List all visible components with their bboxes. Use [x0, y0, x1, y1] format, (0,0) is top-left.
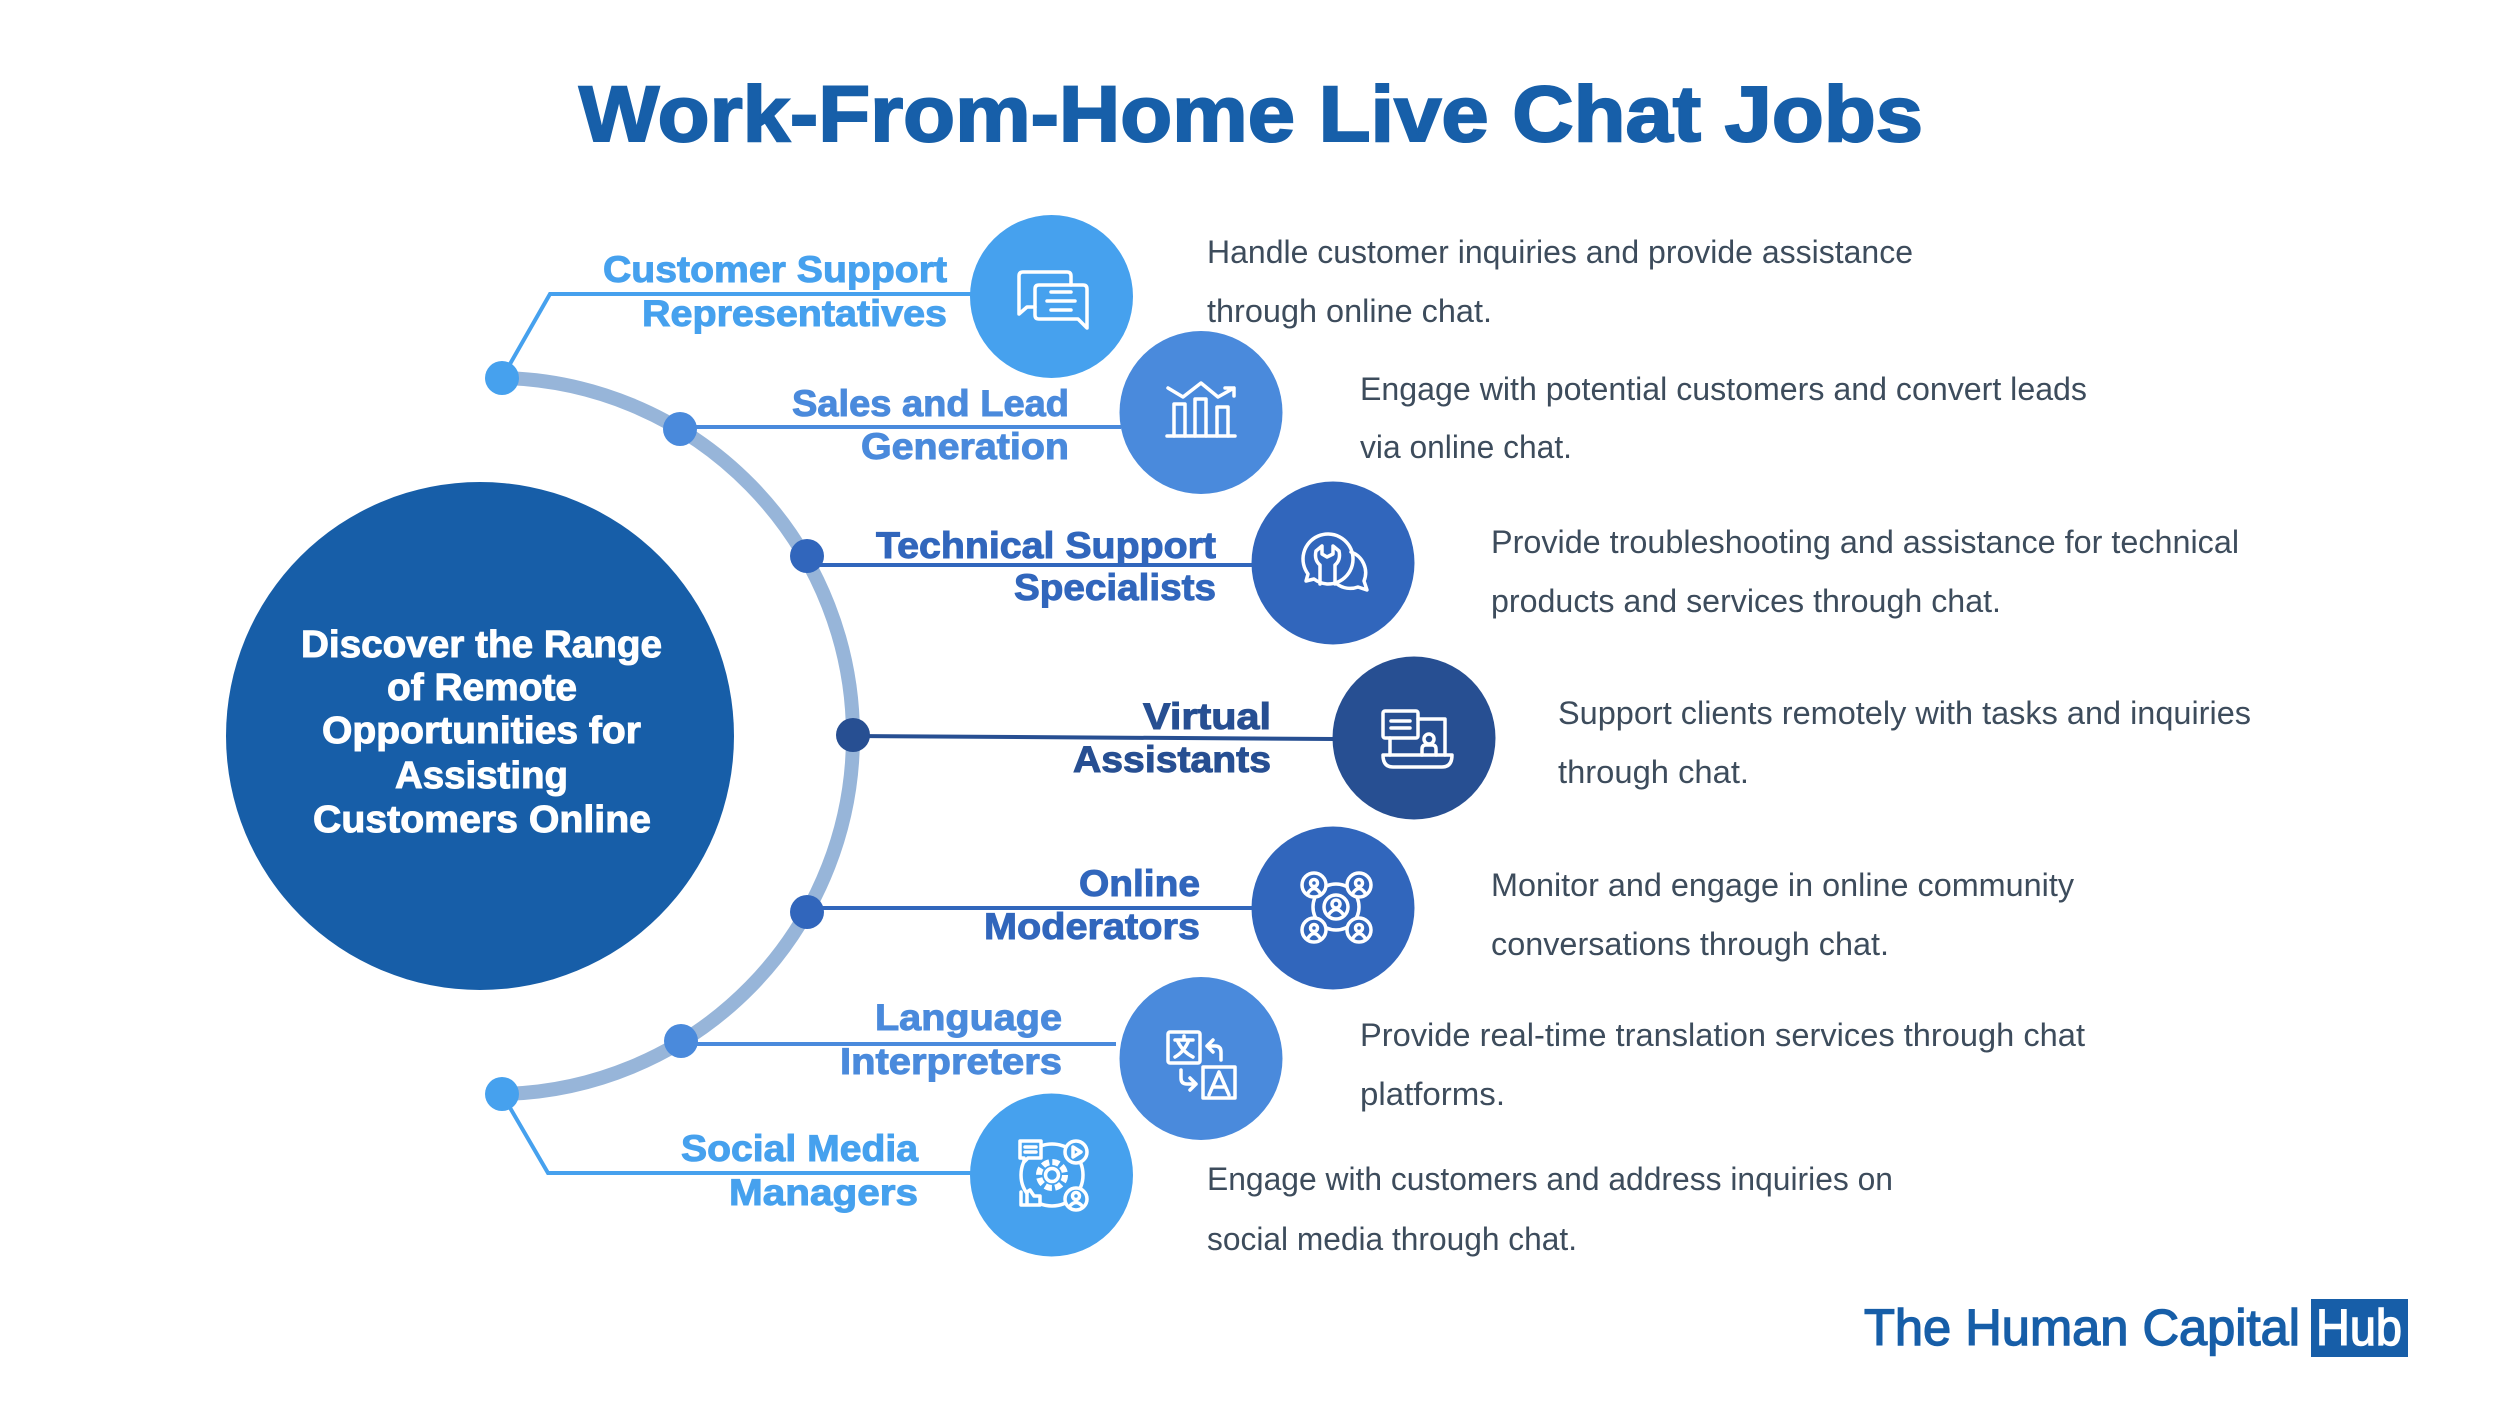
node 7 — [485, 1077, 519, 1111]
node 1 — [485, 361, 519, 395]
connector 2 — [680, 425, 1121, 429]
description 6: Provide real-time translation services through chat — [1360, 1017, 2085, 1053]
node 3 — [790, 539, 824, 573]
description 7: social media through chat. — [1207, 1221, 1577, 1257]
central circle with text: Opportunities for — [322, 710, 641, 752]
node 5 — [790, 895, 824, 929]
description 6 — [1360, 1017, 2085, 1112]
icon circle 7: social media gear — [970, 1094, 1133, 1256]
label 4: Virtual — [1143, 696, 1271, 737]
node 4 — [836, 718, 870, 752]
label 3: Specialists — [1014, 567, 1216, 608]
item 7: social media managers — [485, 1077, 1893, 1257]
icon circle 6: translation — [1120, 977, 1282, 1140]
label 7: Managers — [729, 1172, 918, 1213]
label 7: Social Media — [681, 1128, 918, 1169]
logo: The Human Capital Hub: The Human Capital — [1864, 1299, 2300, 1356]
logo: The Human Capital Hub: Hub — [2316, 1299, 2402, 1356]
description 4: Support clients remotely with tasks and inquiries — [1558, 695, 2251, 731]
label 4 — [1073, 696, 1271, 780]
label 5: Online — [1079, 863, 1200, 904]
label 6: Interpreters — [840, 1041, 1062, 1082]
label 1 — [603, 249, 947, 334]
connector 5 — [807, 906, 1253, 910]
central circle with text: Customers Online — [313, 799, 651, 841]
description 7: Engage with customers and address inquiries on — [1207, 1161, 1893, 1197]
icon circle 5: connected people — [1252, 826, 1414, 990]
icon circle 1: chat bubbles — [970, 215, 1133, 378]
label 2 — [792, 383, 1069, 467]
description 7 — [1207, 1161, 1893, 1257]
item 4: virtual assistants — [836, 656, 2251, 820]
description 5: Monitor and engage in online community — [1491, 867, 2074, 903]
item 2: sales and lead generation — [663, 331, 2087, 494]
label 2: Generation — [861, 426, 1069, 467]
item 6: language interpreters — [664, 977, 2085, 1140]
description 6: platforms. — [1360, 1076, 1505, 1112]
description 1: Handle customer inquiries and provide assistance — [1207, 234, 1913, 270]
node 6 — [664, 1024, 698, 1058]
central circle with text — [226, 482, 734, 990]
icon circle 3: wrench in chat bubbles — [1252, 482, 1414, 644]
label 1: Representatives — [642, 293, 947, 334]
item 1: customer support — [485, 215, 1913, 395]
description 4: through chat. — [1558, 754, 1749, 790]
description 1: through online chat. — [1207, 293, 1492, 329]
description 3 — [1491, 524, 2239, 619]
description 2: Engage with potential customers and convert leads — [1360, 371, 2087, 407]
description 2: via online chat. — [1360, 429, 1572, 465]
icon circle 4: laptop with lock — [1332, 656, 1496, 820]
description 3: products and services through chat. — [1491, 583, 2001, 619]
label 1: Customer Support — [603, 249, 947, 290]
label 6: Language — [875, 997, 1062, 1038]
connector 4 — [853, 736, 1334, 739]
connector 1 — [502, 294, 972, 378]
node 2 — [663, 412, 697, 446]
item 5: online moderators — [790, 826, 2074, 990]
icon circle 2: bar chart with trend — [1120, 331, 1282, 494]
description 5 — [1491, 867, 2074, 962]
description 3: Provide troubleshooting and assistance for technical — [1491, 524, 2239, 560]
title: Work-From-Home Live Chat Jobs — [579, 69, 1923, 158]
label 5: Moderators — [984, 906, 1200, 947]
item 3: technical support — [790, 482, 2239, 644]
description 2 — [1360, 371, 2087, 465]
label 4: Assistants — [1073, 739, 1271, 780]
connector 7 — [502, 1094, 972, 1173]
label 3 — [876, 525, 1216, 608]
description 4 — [1558, 695, 2251, 790]
central circle with text: of Remote — [387, 667, 577, 709]
central circle with text: Discover the Range — [301, 624, 662, 666]
description 1 — [1207, 234, 1913, 329]
label 5 — [984, 863, 1200, 947]
label 6 — [840, 997, 1062, 1082]
description 5: conversations through chat. — [1491, 926, 1889, 962]
label 7 — [681, 1128, 918, 1213]
central arc — [502, 378, 853, 1094]
label 3: Technical Support — [876, 525, 1216, 566]
label 2: Sales and Lead — [792, 383, 1069, 424]
connector 6 — [681, 1042, 1116, 1046]
connector 3 — [807, 563, 1253, 567]
central circle with text: Assisting — [395, 755, 568, 797]
